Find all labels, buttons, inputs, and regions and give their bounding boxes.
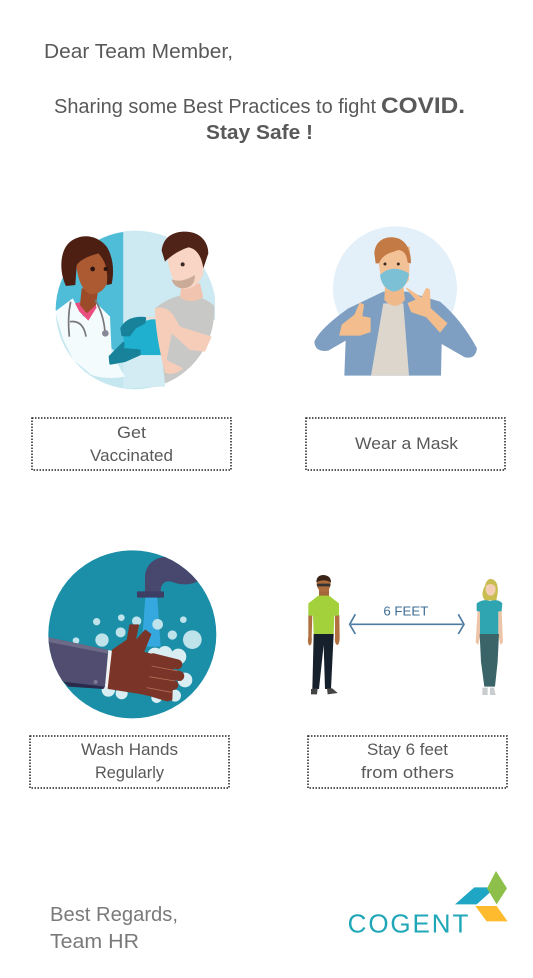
arrow — [350, 614, 464, 634]
greeting: Dear Team Member, — [44, 41, 233, 63]
heading: Sharing some Best Practices to fight — [54, 96, 376, 118]
box: stay 6 feet: from others — [361, 763, 454, 782]
soap foam — [102, 646, 192, 703]
patient — [155, 232, 217, 383]
sleeve — [47, 637, 108, 687]
icon: doctor vaccinating patient — [55, 231, 217, 389]
box: wash hands: Wash Hands — [81, 740, 178, 759]
logo: cogent — [348, 871, 508, 939]
hand — [108, 625, 179, 700]
sign-off: Best Regards, — [50, 904, 178, 926]
box: get vaccinated: Vaccinated — [90, 446, 173, 465]
box: stay 6 feet — [308, 736, 507, 788]
man figure — [308, 575, 340, 694]
logo: cogent: COGENT — [348, 909, 468, 939]
sign-off: Team HR — [50, 931, 139, 953]
heading — [54, 93, 465, 144]
box: stay 6 feet: Stay 6 feet — [367, 740, 448, 759]
pointing hand — [407, 288, 447, 332]
box: wear a mask: Wear a Mask — [355, 434, 459, 453]
heading: Stay Safe ! — [206, 122, 313, 144]
box: wear a mask — [306, 418, 505, 470]
icon: washing hands — [47, 550, 216, 718]
woman figure — [476, 579, 503, 695]
sign-off — [50, 904, 178, 953]
doctor — [55, 236, 155, 378]
icon: man wearing mask — [314, 226, 477, 376]
box: wash hands: Regularly — [95, 763, 164, 782]
box: get vaccinated — [32, 418, 231, 470]
distance label: 6 FEET — [383, 604, 428, 619]
thumbs up hand — [340, 303, 370, 335]
box: wash hands — [30, 736, 229, 788]
box: get vaccinated: Get — [117, 423, 146, 442]
icon: six feet distance — [308, 575, 503, 695]
heading: COVID. — [381, 93, 465, 118]
